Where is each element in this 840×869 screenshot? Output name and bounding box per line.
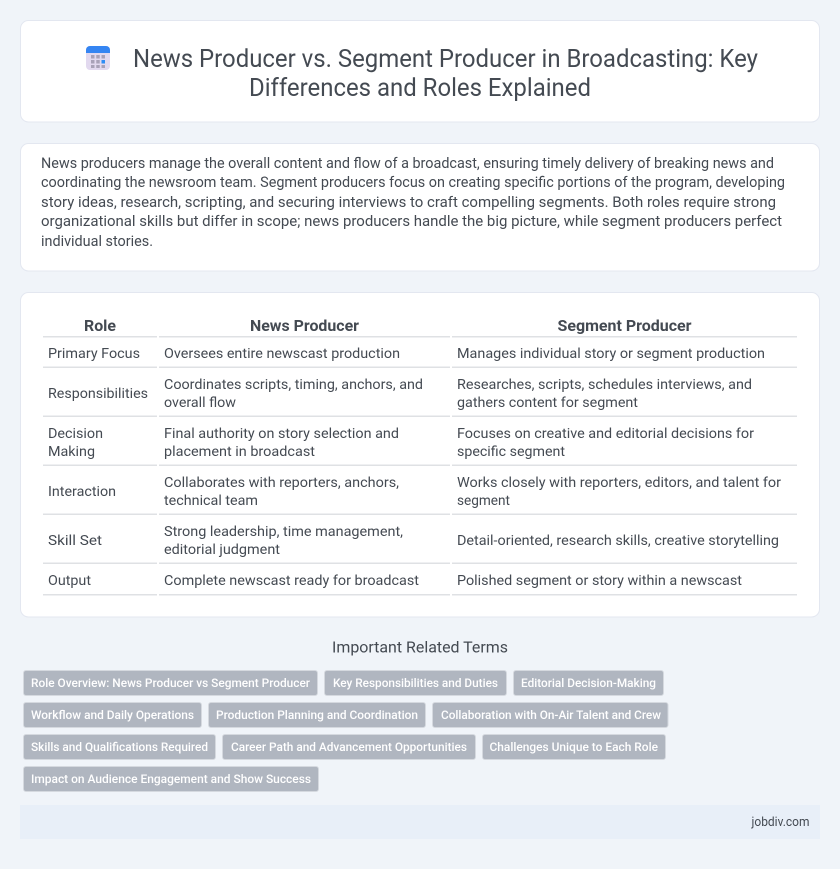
row: primary focus: Oversees entire newscast production [164,346,400,362]
row: decision making: specific segment [457,444,565,460]
row: decision making [48,426,754,460]
icon: calendar [86,46,110,70]
row: decision making: placement in broadcast [164,444,315,460]
title: News Producer vs. Segment Producer in Broadcasting: Key [133,45,758,74]
row: responsibilities: Responsibilities [48,386,148,402]
tag row 3: Skills and Qualifications Required [31,740,208,754]
row: responsibilities: gathers content for segment [457,395,638,411]
table header: News Producer [250,317,359,335]
row: skill set: Detail-oriented, research skills, creative storytelling [457,533,779,549]
text block: intro: News producers manage the overall content and flow of a broadcast, ensuring timely delivery of breaking news and [41,155,774,172]
title: Differences and Roles Explained [249,74,591,103]
tag row 2: Production Planning and Coordination [216,708,418,722]
row: decision making: Focuses on creative and editorial decisions for [457,426,754,442]
tag row 4 [24,766,318,792]
tag row 1 [24,670,664,696]
text block: intro: organizational skills but differ in scope; news producers handle the big picture, while segment producers perfect [41,213,782,230]
table header: Role [84,317,116,335]
title [133,45,758,103]
row: responsibilities [48,377,752,411]
row: decision making: Final authority on story selection and [164,426,399,442]
panel: comparison table [20,292,820,617]
row: interaction: technical team [164,493,258,509]
row: primary focus: Primary Focus [48,346,140,362]
text block: intro: coordinating the newsroom team. Segment producers focus on creating specific portions of the program, developing [41,174,785,191]
tag row 1: Editorial Decision-Making [521,676,656,690]
tag row 3: Career Path and Advancement Opportunities [231,740,467,754]
row: interaction: Collaborates with reporters, anchors, [164,475,399,491]
table header [84,317,692,335]
row: responsibilities: Researches, scripts, schedules interviews, and [457,377,752,393]
tag row 2 [24,702,668,728]
row: interaction: segment [457,493,510,509]
table header: Segment Producer [558,317,692,335]
row: output: Polished segment or story within a newscast [457,573,742,589]
tag row 1: Role Overview: News Producer vs Segment Producer [31,676,311,690]
row: output: Complete newscast ready for broadcast [164,573,419,589]
panel: intro paragraph [20,144,820,271]
text block: intro [41,155,785,250]
row: interaction [48,475,781,509]
tag row 2: Workflow and Daily Operations [31,708,194,722]
row: decision making: Decision [48,426,103,442]
row: output: Output [48,573,91,589]
row: responsibilities: overall flow [164,395,236,411]
row: interaction: Interaction [48,484,116,500]
footer [20,805,820,839]
heading: related terms: Important Related Terms [332,638,508,656]
text block: intro: individual stories. [41,233,153,250]
row: skill set [48,524,779,558]
row: primary focus [48,346,765,362]
panel: title card [20,20,820,122]
text block: intro: story ideas, research, scripting, and securing interviews to craft compelling segments. Both roles require strong [41,194,776,211]
tag row 1: Key Responsibilities and Duties [333,676,498,690]
table rules [43,336,797,596]
row: skill set: Strong leadership, time management, [164,524,403,540]
tag row 4: Impact on Audience Engagement and Show Success [31,772,311,786]
row: skill set: editorial judgment [164,542,280,558]
row: interaction: Works closely with reporters, editors, and talent for [457,475,781,491]
tag row 3: Challenges Unique to Each Role [490,740,659,754]
row: skill set: Skill Set [48,533,102,549]
row: primary focus: Manages individual story or segment production [457,346,765,362]
row: output [48,573,742,589]
row: responsibilities: Coordinates scripts, timing, anchors, and [164,377,423,393]
tags: related terms [24,670,668,792]
tag row 2: Collaboration with On-Air Talent and Crew [441,708,661,722]
tag row 3 [24,734,666,760]
row: decision making: Making [48,444,95,460]
footer: jobdiv.com [751,815,810,830]
